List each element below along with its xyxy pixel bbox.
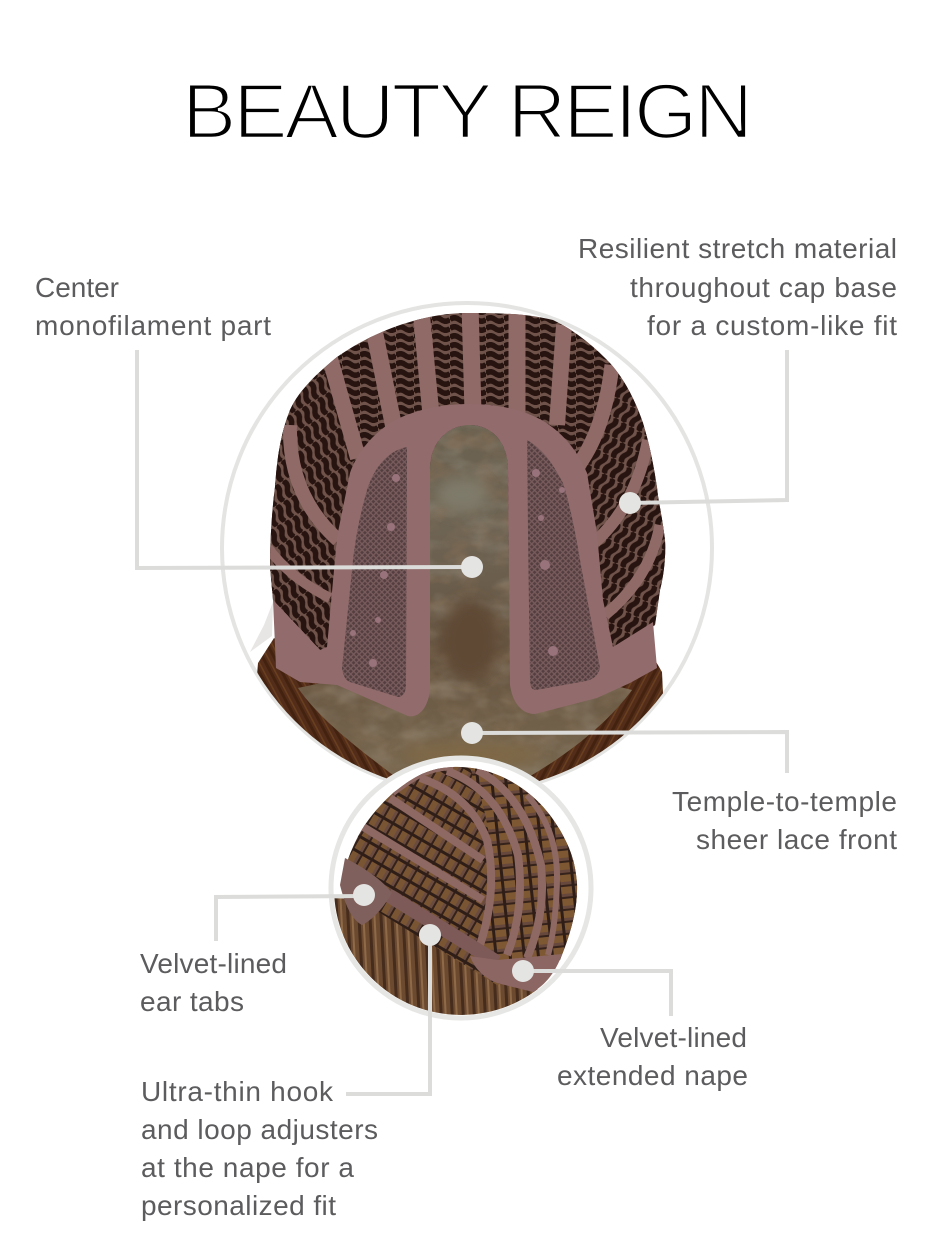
label: hook and loop adjusters: personalized fit [141,1190,336,1221]
label: hook and loop adjusters: Ultra-thin hook [141,1076,334,1107]
label: temple-to-temple lace front [672,786,897,855]
sheer lace front and monofilament part [298,425,632,778]
cap ribs [268,305,660,615]
label: hook and loop adjusters: and loop adjusters [141,1114,378,1145]
label: velvet-lined extended nape: extended nape [557,1060,748,1091]
title: BEAUTY REIGN [182,67,750,155]
label: resilient stretch material: throughout cap base [630,272,897,303]
small cap illustration [330,758,591,1020]
velvet nape tab [470,954,562,992]
label: hook and loop adjusters: at the nape for a [141,1152,354,1183]
label: velvet-lined ear tabs: ear tabs [140,986,244,1017]
small cap ribs [360,767,557,958]
connector: velvet-lined nape [512,960,671,1016]
label: center monofilament part: Center [35,272,119,303]
connector: hook and loop adjusters [346,924,441,1094]
label: velvet-lined extended nape: Velvet-lined [600,1022,747,1053]
pink cap band [273,404,657,716]
large circle frame [222,303,712,793]
right lace panel [527,440,600,690]
velvet ear tab [340,858,392,925]
left lace panel [342,447,407,697]
label: velvet-lined extended nape [557,1022,748,1091]
label: temple-to-temple lace front: sheer lace front [696,824,897,855]
connector: center monofilament part [137,350,483,578]
cap wefting [260,305,675,660]
hair behind large cap [250,602,663,781]
connector: temple-to-temple lace front [461,722,787,773]
large cap illustration [222,303,712,800]
small circle frame [331,758,591,1018]
hair behind small cap [330,898,540,1020]
label: velvet-lined ear tabs [140,948,287,1017]
small cap wefting [348,766,578,985]
label: resilient stretch material: Resilient stretch material [578,233,897,264]
label: temple-to-temple lace front: Temple-to-temple [672,786,897,817]
connector: resilient stretch material [619,350,787,514]
mono part shading [290,420,640,780]
label: resilient stretch material: for a custom-like fit [647,310,897,341]
lace panel knots [350,469,565,667]
connector: velvet-lined ear tabs [216,884,375,941]
label: hook and loop adjusters [141,1076,378,1221]
label: resilient stretch material [578,233,897,341]
label: center monofilament part: monofilament part [35,310,271,341]
hook and loop band [388,895,497,962]
label: velvet-lined ear tabs: Velvet-lined [140,948,287,979]
label: center monofilament part [35,272,271,341]
